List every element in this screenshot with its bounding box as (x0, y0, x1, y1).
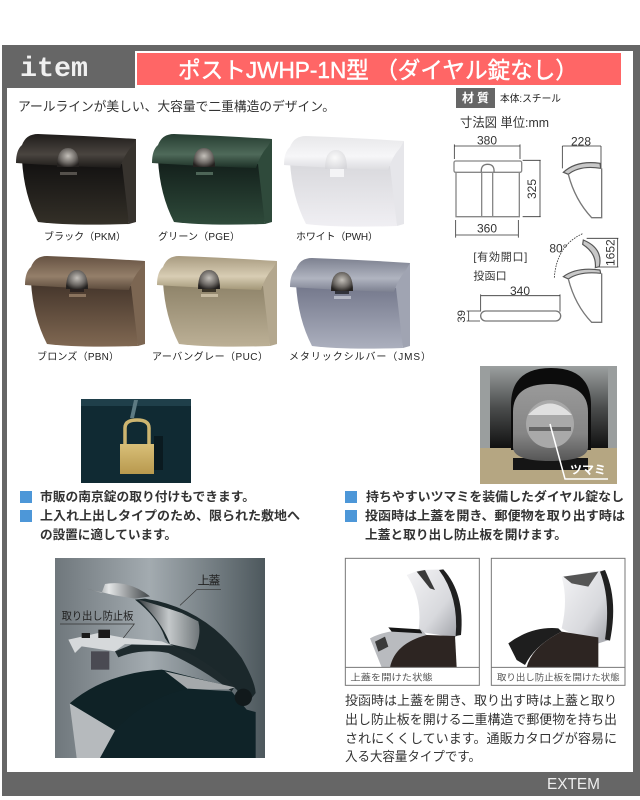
slot drawing: 340 (510, 284, 530, 298)
intro text: アールラインが美しい、大容量で二重構造のデザイン。 (18, 99, 335, 114)
color labels: ブラック（PKM） (44, 230, 126, 243)
header: product title band (137, 53, 621, 85)
effective opening labels (473, 250, 527, 283)
description paragraph (345, 693, 617, 764)
color variants (16, 134, 431, 363)
color labels: ブロンズ（PBN） (37, 350, 119, 363)
bullets: right column: 上蓋と取り出し防止板を開けます。 (365, 527, 567, 542)
photo: plate open state (491, 558, 625, 685)
bullets: left column: の設置に適しています。 (40, 527, 177, 542)
bullets: right column: 持ちやすいツマミを装備したダイヤル錠なし (366, 489, 624, 504)
header: item tab: item (20, 54, 88, 85)
color labels: アーバングレー（PUC） (152, 350, 268, 363)
front view: 380 (477, 133, 497, 147)
theft-prevention plate (68, 633, 172, 653)
knob label: ツマミ (570, 463, 606, 477)
color labels: メタリックシルバー（JMS） (289, 351, 431, 363)
dimension heading: 寸法図 単位:mm (460, 115, 549, 130)
front view: 360 (477, 221, 497, 235)
footer brand: EXTEM (547, 776, 600, 793)
photo: lid open state (345, 558, 479, 685)
material label: 材質 (462, 90, 489, 105)
product: black mailbox (16, 134, 136, 225)
open lid (135, 599, 256, 705)
photo: open mailbox (55, 558, 265, 758)
slot drawing (456, 284, 561, 323)
opening angle view (549, 233, 618, 322)
header: product title band: ポストJWHP-1N型 （ダイヤル錠なし） (178, 57, 578, 83)
bullets: right column (345, 489, 626, 542)
front view: 325 (525, 179, 539, 199)
product: bronze mailbox (25, 256, 145, 347)
photo: knob (480, 366, 617, 484)
product: metallic silver mailbox (290, 258, 410, 349)
opening angle view: 80° (549, 242, 568, 256)
description paragraph: されにくくしています。通販カタログが容易に (345, 731, 617, 746)
side view: 228 (571, 134, 591, 148)
upper lid label: 上蓋 (198, 574, 220, 588)
material label: 本体:スチール (500, 92, 561, 105)
description paragraph: 出し防止板を開ける二重構造で郵便物を持ち出 (345, 712, 617, 727)
dimension drawings (454, 133, 618, 323)
product: green mailbox (152, 134, 272, 225)
effective opening labels: [有効開口] (473, 250, 527, 264)
product: white mailbox (284, 136, 404, 227)
bullets: left column: 上入れ上出しタイプのため、限られた敷地へ (40, 508, 301, 523)
product: urban gray mailbox (157, 256, 277, 347)
bullets: right column: 投函時は上蓋を開き、郵便物を取り出す時は (365, 508, 626, 523)
knob pointer line (550, 424, 608, 479)
slot drawing: 39 (456, 310, 468, 323)
photo: padlock (81, 399, 191, 483)
material label (456, 88, 561, 108)
plate label: 取り出し防止板 (62, 609, 133, 623)
bullets: left column: 市販の南京錠の取り付けもできます。 (40, 489, 255, 504)
plate label (60, 609, 134, 638)
effective opening labels: 投函口 (473, 269, 507, 283)
header: item tab (7, 51, 135, 88)
side view (562, 134, 602, 218)
color labels (37, 230, 431, 363)
description paragraph: 入る大容量タイプです。 (345, 749, 481, 764)
opening angle view: 1652 (604, 239, 618, 266)
description paragraph: 投函時は上蓋を開き、取り出す時は上蓋と取り (345, 693, 617, 708)
caption: 取り出し防止板を開けた状態 (497, 672, 620, 683)
caption: 上蓋を開けた状態 (350, 672, 433, 683)
bullets: left column (20, 489, 301, 542)
upper lid label (180, 574, 221, 605)
color labels: グリーン（PGE） (158, 230, 240, 243)
color labels: ホワイト（PWH） (296, 231, 378, 243)
front view (454, 133, 541, 238)
open box (70, 670, 235, 731)
